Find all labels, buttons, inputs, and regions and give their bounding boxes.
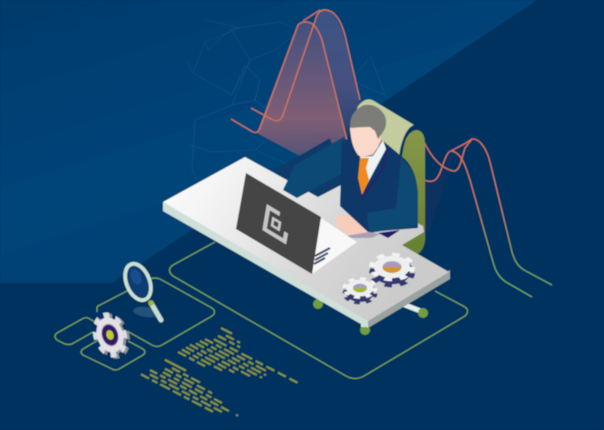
chart: right curve lines: [423, 139, 552, 297]
gear icon: small desk gear: [345, 279, 375, 303]
desk legs: [313, 299, 428, 335]
chart: bell curve lines: [231, 10, 360, 140]
laptop base: [300, 218, 357, 274]
gear icon: large desk gear: [372, 255, 412, 286]
desk: [163, 157, 450, 328]
laptop screen: [236, 173, 321, 274]
chart: front bell curve fill: [257, 22, 347, 182]
keyboard: [314, 248, 330, 264]
lens shadow: [132, 305, 160, 319]
cuff shadow: [345, 232, 380, 238]
arm reaching to laptop: [283, 136, 345, 198]
circuit trace: large desk outline: [170, 242, 468, 378]
chart: right curve fade: [424, 152, 497, 270]
shirt: [360, 140, 386, 190]
sleeve: [367, 158, 418, 233]
circuit trace: lower panel: [81, 339, 145, 370]
code block: lower cluster: [141, 360, 238, 416]
hair: [350, 105, 386, 139]
desk thickness: [163, 202, 450, 328]
code block: upper cluster: [178, 328, 298, 383]
gear icon: left: [90, 311, 133, 360]
laptop logo: [265, 207, 288, 241]
hand: [336, 215, 369, 236]
lighter diagonal background region: [0, 0, 537, 283]
circuit trace: left panel: [55, 318, 95, 344]
network constellation: [186, 20, 385, 195]
desk shadow under arm: [275, 138, 345, 198]
handle: [151, 303, 161, 320]
torso: [340, 138, 418, 232]
lapel line: [362, 150, 387, 198]
chair: [350, 99, 425, 257]
tie: [358, 158, 369, 195]
chair side: [400, 130, 425, 257]
man: [283, 105, 418, 238]
chair back: [350, 99, 414, 190]
lens ring: [120, 260, 156, 304]
neck: [356, 130, 382, 157]
magnifying glass: [120, 260, 161, 320]
circuit trace: magnifier panel: [97, 278, 214, 346]
desk top: [163, 157, 449, 321]
face: [350, 118, 384, 157]
laptop: [236, 173, 357, 274]
chart: rear bell curve fill: [278, 10, 360, 140]
